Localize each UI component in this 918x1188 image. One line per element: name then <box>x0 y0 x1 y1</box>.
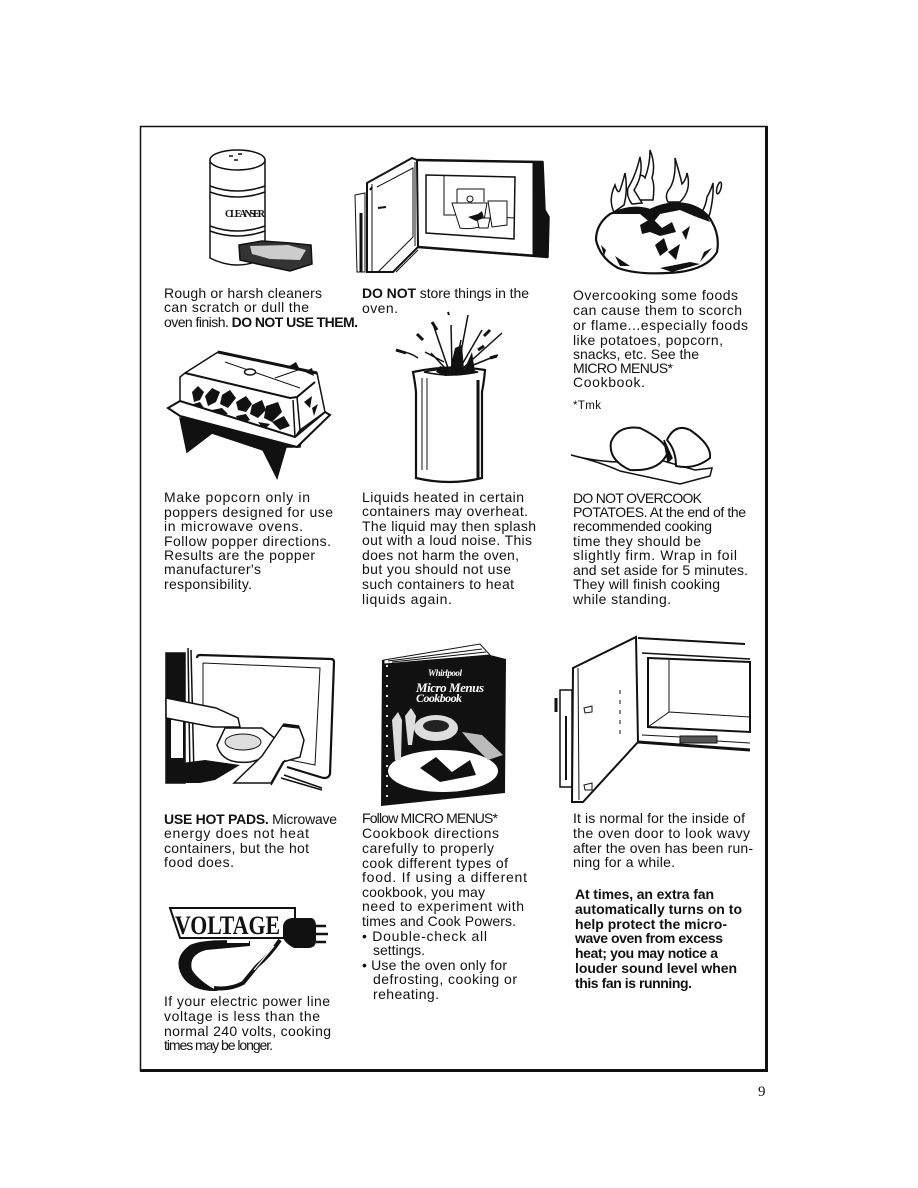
text block: do not overcook potatoes: time they should be <box>573 533 701 549</box>
text block: overcooking: can cause them to scorch <box>573 302 742 318</box>
text block: liquids: The liquid may then splash <box>362 518 536 534</box>
text block: cookbook directions: cook different types of <box>362 855 508 871</box>
icon: Micro Menus cookbook: Cookbook <box>416 691 462 705</box>
icon: Micro Menus cookbook: Whirlpool <box>428 668 462 678</box>
icon: cleanser can and scouring pad: CLEANSER <box>225 209 266 220</box>
text block: popcorn <box>164 489 333 592</box>
text block: extra fan note: heat; you may notice a <box>575 945 718 961</box>
text block: use hot pads: energy does not heat <box>164 825 309 841</box>
text block: popcorn: responsibility. <box>164 576 252 592</box>
icon: open oven showing door <box>556 637 750 802</box>
text block: popcorn: Results are the popper <box>164 547 315 563</box>
text block: voltage note: normal 240 volts, cooking <box>164 1023 331 1039</box>
text block: liquids <box>362 489 536 607</box>
text block: voltage note: If your electric power line <box>164 993 330 1009</box>
text block: use hot pads: containers, but the hot <box>164 840 309 856</box>
text block: do not overcook potatoes: and set aside for 5 minutes. <box>573 562 748 578</box>
text block: do not overcook potatoes: They will finish cooking <box>573 576 720 592</box>
text block: popcorn: in microwave ovens. <box>164 518 303 534</box>
text block: liquids: Liquids heated in certain <box>362 489 524 505</box>
text block: liquids: containers may overheat. <box>362 503 528 519</box>
text block: popcorn: Follow popper directions. <box>164 533 331 549</box>
text block: use hot pads <box>164 811 337 870</box>
text block: extra fan note: this fan is running. <box>575 975 692 991</box>
text block: do not overcook potatoes: DO NOT OVERCOOK <box>573 490 703 506</box>
text block: extra fan note: louder sound level when <box>575 960 737 976</box>
text block: cookbook directions: • Use the oven only for <box>362 957 507 973</box>
text block: wavy door: the oven door to look wavy <box>573 825 750 841</box>
icon: voltage plug and cord <box>170 908 328 991</box>
text block: overcooking: snacks, etc. See the <box>573 346 699 362</box>
text block: do not overcook potatoes <box>572 490 748 607</box>
text block: extra fan note: automatically turns on to <box>575 901 742 917</box>
text block: extra fan note: At times, an extra fan <box>575 886 714 902</box>
text block: cookbook directions: food. If using a different <box>362 869 527 885</box>
text block: cookbook directions: defrosting, cooking or <box>373 971 517 987</box>
page number: 9 <box>758 1084 766 1100</box>
text block: liquids: does not harm the oven, <box>362 547 519 563</box>
text block: extra fan note: wave oven from excess <box>574 930 723 946</box>
icon: microwave popcorn popper <box>168 352 330 478</box>
text block: overcooking <box>573 287 748 412</box>
text block: overcooking: like potatoes, popcorn, <box>573 332 723 348</box>
text block: do not overcook potatoes: POTATOES. At the end of the <box>573 504 746 520</box>
text block: popcorn: poppers designed for use <box>164 504 333 520</box>
text block: liquids: such containers to heat <box>362 576 514 592</box>
text block: voltage note: voltage is less than the <box>164 1008 320 1024</box>
text block: wavy door: ning for a while. <box>573 854 675 870</box>
text block: cookbook directions: Cookbook directions <box>362 825 499 841</box>
text block: do not store: oven. <box>362 300 398 316</box>
text block: overcooking: or flame...especially foods <box>573 317 748 333</box>
text block: overcooking: Overcooking some foods <box>573 287 738 303</box>
text block: extra fan note <box>574 886 742 991</box>
text block: cookbook directions: carefully to properly <box>362 840 494 856</box>
text block: popcorn: Make popcorn only in <box>164 489 310 505</box>
icon: wrapped potatoes on foil <box>571 428 712 484</box>
icon: voltage plug and cord: VOLTAGE <box>175 911 280 940</box>
text block: harsh cleaners <box>164 285 358 330</box>
text block: wavy door <box>573 810 753 870</box>
icon: hands lifting dish from oven <box>166 648 334 790</box>
text block: cookbook directions: Follow MICRO MENUS* <box>362 810 499 826</box>
text block: liquids: but you should not use <box>362 561 511 577</box>
text block: cookbook directions: need to experiment with <box>362 898 524 914</box>
text block: extra fan note: help protect the micro- <box>575 916 727 932</box>
panel: page frame <box>140 126 768 1071</box>
icon: open oven with stored items <box>355 158 549 272</box>
text block: do not overcook potatoes: while standing. <box>572 591 671 607</box>
text block: cookbook directions: settings. <box>373 942 425 958</box>
text block: do not store <box>362 285 529 316</box>
text block: cookbook directions: cookbook, you may <box>362 884 485 900</box>
text block: overcooking: *Tmk <box>573 400 601 412</box>
icon: Micro Menus cookbook <box>381 644 506 806</box>
icon: Micro Menus cookbook: Micro Menus <box>415 680 484 695</box>
text block: overcooking: MICRO MENUS* <box>573 360 674 376</box>
text block: voltage note: times may be longer. <box>164 1037 273 1053</box>
text block: cookbook directions: times and Cook Powers. <box>362 913 516 929</box>
text block: do not overcook potatoes: slightly firm. Wrap in foil <box>573 547 737 563</box>
text block: overcooking: Cookbook. <box>573 374 645 390</box>
text block: wavy door: after the oven has been run- <box>573 840 753 856</box>
text block: cookbook directions: reheating. <box>373 986 439 1002</box>
text block: cookbook directions <box>362 810 527 1002</box>
text block: harsh cleaners: can scratch or dull the <box>164 299 309 315</box>
icon: vase with splashing liquid <box>396 312 502 482</box>
text block: popcorn: manufacturer's <box>164 561 261 577</box>
text block: harsh cleaners: oven finish. DO NOT USE THEM. <box>164 314 358 330</box>
text block: do not store: DO NOT store things in the <box>362 285 529 301</box>
text block: liquids: out with a loud noise. This <box>362 532 532 548</box>
icon: burning potato <box>596 150 722 273</box>
icon: cleanser can and scouring pad <box>210 150 312 271</box>
text block: wavy door: It is normal for the inside of <box>573 810 745 826</box>
text block: voltage note <box>164 993 331 1053</box>
text block: use hot pads: USE HOT PADS. Microwave <box>164 811 337 827</box>
text block: cookbook directions: • Double-check all <box>362 928 487 944</box>
text block: use hot pads: food does. <box>164 854 234 870</box>
text block: do not overcook potatoes: recommended cooking <box>573 518 712 534</box>
text block: liquids: liquids again. <box>362 591 452 607</box>
text block: harsh cleaners: Rough or harsh cleaners <box>164 285 322 301</box>
